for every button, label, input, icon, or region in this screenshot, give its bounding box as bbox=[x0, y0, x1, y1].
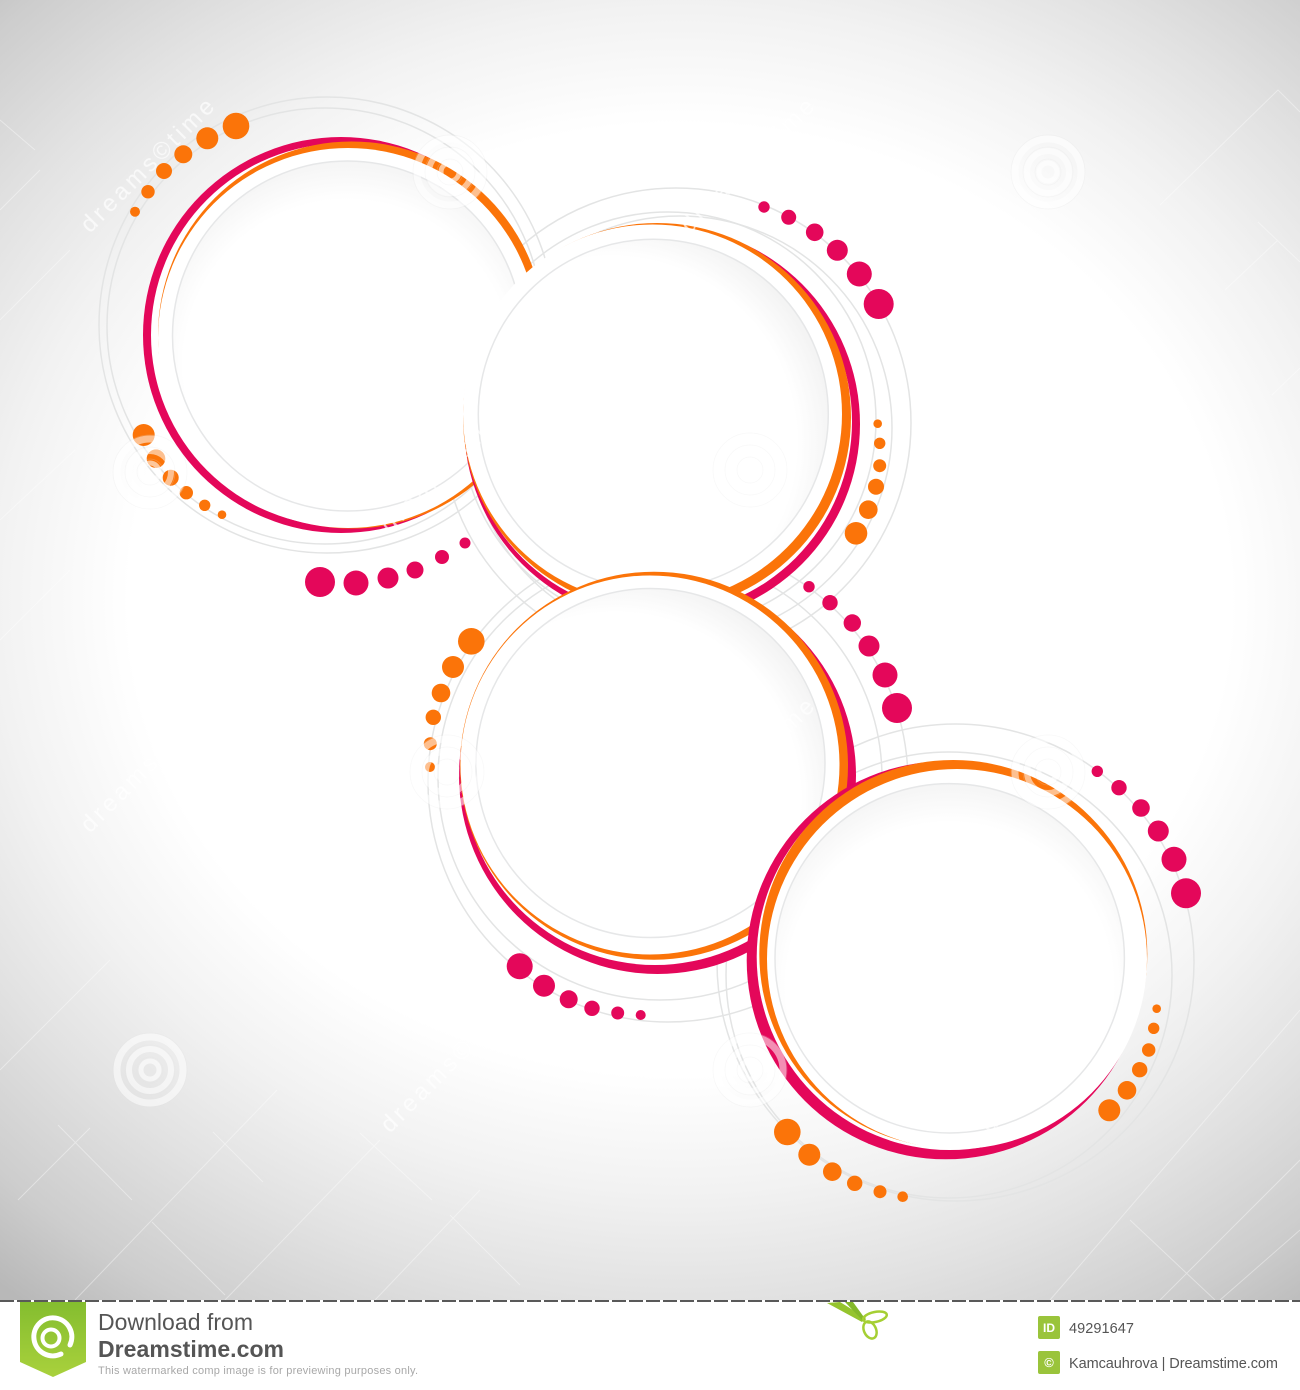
icon: scissors bbox=[827, 1302, 888, 1341]
watermark text: dreams©time bbox=[975, 393, 1120, 538]
icon: copyright badge bbox=[1038, 1351, 1060, 1374]
circle 4 bbox=[747, 760, 1147, 1159]
circle 1 bbox=[143, 137, 545, 533]
watermark text: dreams©time bbox=[975, 993, 1120, 1138]
disclaimer text: This watermarked comp image is for previewing purposes only. bbox=[98, 1365, 418, 1377]
footer strip bbox=[0, 1300, 1300, 1390]
download heading: Download from bbox=[98, 1309, 253, 1335]
watermark text: dreams©time bbox=[75, 693, 220, 838]
watermark spirals bbox=[113, 135, 1085, 1107]
dots: pink arc right of circle 4 bbox=[1092, 766, 1201, 908]
watermark text bbox=[75, 93, 1120, 1138]
dashed cut line bbox=[0, 1300, 1300, 1302]
dots: orange arc bottom-left of circle 1 bbox=[133, 424, 226, 519]
download heading: Dreamstime.com bbox=[98, 1336, 284, 1362]
dots: orange arc below circle 4 bbox=[774, 1119, 908, 1202]
dots: orange arc top-left of circle 1 bbox=[130, 113, 249, 217]
dots: pink arc below circle 3 bbox=[507, 953, 646, 1020]
dots: orange arc lower-right of circle 4 bbox=[1098, 1004, 1161, 1121]
dots: pink arc top-right of circle 2 bbox=[758, 201, 894, 319]
watermark text: dreams©time bbox=[675, 93, 820, 238]
watermark text: dreams©time bbox=[75, 93, 220, 238]
icon: copyright badge: © bbox=[1044, 1355, 1054, 1370]
dots: pink arc below circle 1 bbox=[305, 538, 470, 597]
image id number: 49291647 bbox=[1069, 1321, 1134, 1337]
thin grey outer rings bbox=[99, 97, 1194, 1201]
dots: orange arc left of circle 3 bbox=[424, 628, 485, 772]
watermark text: dreams©time bbox=[675, 693, 820, 838]
watermark text: dreams©time bbox=[375, 993, 520, 1138]
icon: ID badge bbox=[1038, 1316, 1060, 1339]
author credit: Kamcauhrova | Dreamstime.com bbox=[1069, 1356, 1278, 1372]
icon: dreamstime badge bbox=[20, 1302, 86, 1377]
circle 2 bbox=[463, 223, 860, 622]
icon: ID badge: ID bbox=[1043, 1321, 1055, 1335]
dots: orange arc right of circle 2 bbox=[845, 419, 886, 545]
watermark text: dreams©time bbox=[375, 393, 520, 538]
circle 3 bbox=[459, 572, 856, 974]
dots: pink arc right of circle 3 bbox=[803, 581, 912, 723]
download heading bbox=[98, 1309, 284, 1362]
